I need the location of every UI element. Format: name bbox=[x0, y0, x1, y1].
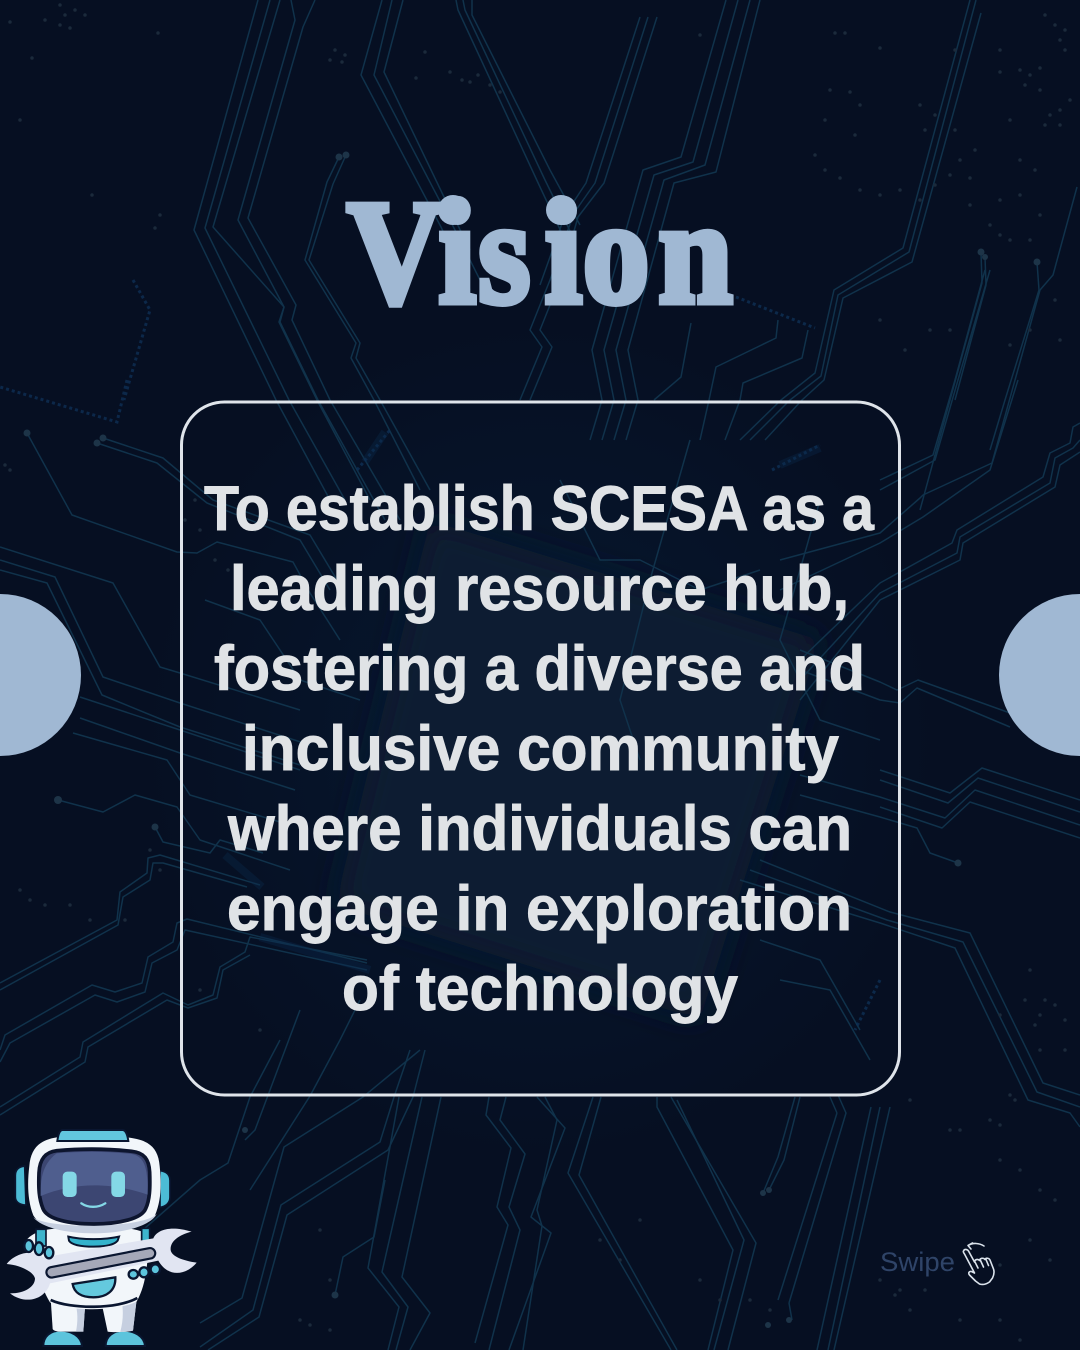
robot hands bbox=[24, 1240, 160, 1279]
vision statement text bbox=[204, 474, 875, 1024]
robot collar bbox=[68, 1237, 119, 1247]
swipe label: Swipe bbox=[880, 1247, 955, 1277]
vision statement text: of technology bbox=[342, 954, 738, 1024]
vision statement text: leading resource hub, bbox=[230, 554, 849, 624]
vision statement text: To establish SCESA as a bbox=[204, 474, 875, 544]
robot torso bbox=[27, 1228, 150, 1309]
panel: vision statement bbox=[182, 402, 900, 1095]
decorative circle: left bbox=[0, 594, 81, 756]
robot legs bbox=[51, 1297, 137, 1332]
vision statement text: fostering a diverse and bbox=[214, 634, 865, 704]
robot visor bbox=[39, 1149, 150, 1224]
title: Vision: Vision bbox=[347, 172, 732, 335]
robot top cap bbox=[57, 1130, 128, 1141]
vision statement text: engage in exploration bbox=[227, 874, 852, 944]
robot feet bbox=[43, 1331, 145, 1346]
icon: swipe hand bbox=[963, 1243, 994, 1284]
vision statement text: where individuals can bbox=[227, 794, 852, 864]
robot smile bbox=[81, 1203, 105, 1207]
icon: robot astronaut with wrench bbox=[7, 1130, 197, 1346]
decorative circle: right bbox=[999, 594, 1080, 756]
robot ears bbox=[15, 1166, 170, 1207]
wrench bbox=[7, 1229, 197, 1300]
robot eyes bbox=[63, 1172, 125, 1197]
vision statement text: inclusive community bbox=[242, 714, 839, 784]
robot helmet bbox=[28, 1135, 161, 1233]
